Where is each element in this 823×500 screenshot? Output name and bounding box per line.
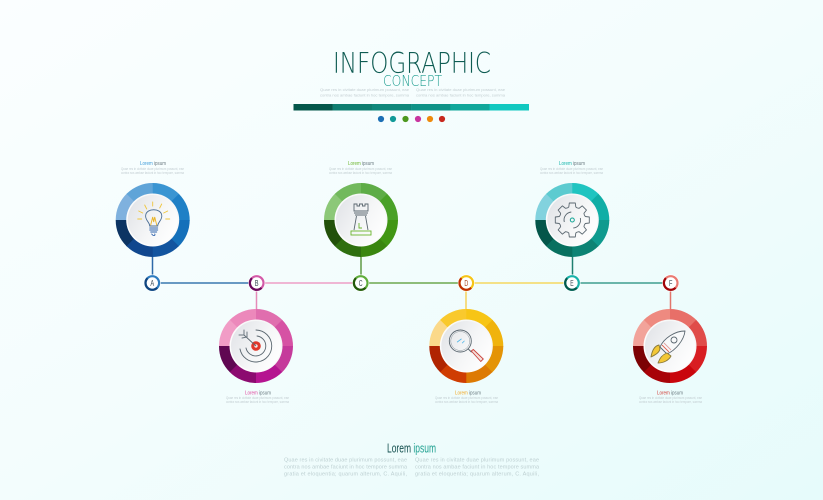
label E: Quae res in civitate duae plurimum possunt, eae xyxy=(540,166,604,171)
header text block: Quae res in civitate duae plurimum possunt, eae xyxy=(416,87,506,92)
item A xyxy=(108,161,197,265)
label C xyxy=(329,161,393,175)
label D: Lorem ipsum xyxy=(455,390,481,396)
node C xyxy=(351,273,370,293)
footer text block: contra nos ambae faciunt in hoc tempore summa xyxy=(284,464,408,470)
label A: Lorem ipsum xyxy=(140,161,166,167)
label F: contra nos ambae faciunt in hoc tempore, summa xyxy=(639,399,703,404)
node F: F xyxy=(669,279,672,288)
footer text block: Quae res in civitate duae plurimum possunt, eae xyxy=(415,458,539,464)
label F: Quae res in civitate duae plurimum possunt, eae xyxy=(639,395,703,400)
item D xyxy=(422,301,511,404)
header text block: contra nos ambae faciunt in hoc tempore, summa xyxy=(320,92,410,98)
icon: rocket xyxy=(651,331,685,363)
colour dots xyxy=(378,116,445,122)
label E xyxy=(540,161,604,175)
timeline xyxy=(152,256,671,310)
item F xyxy=(625,301,715,404)
ring E xyxy=(528,175,617,265)
node B xyxy=(247,273,266,293)
icon: chess rook xyxy=(351,204,371,235)
node F xyxy=(661,273,680,293)
ring F xyxy=(625,301,715,391)
label A: Quae res in civitate duae plurimum possunt, eae xyxy=(121,166,185,171)
node D xyxy=(457,273,476,293)
header text block xyxy=(320,87,506,98)
label E: Lorem ipsum xyxy=(559,161,585,167)
label C: Quae res in civitate duae plurimum possunt, eae xyxy=(329,166,393,171)
node E xyxy=(562,273,582,293)
header text block: contra nos ambae faciunt in hoc tempore, summa xyxy=(416,92,506,98)
node D: D xyxy=(464,279,468,288)
node E: E xyxy=(570,279,574,288)
icon: magnifier xyxy=(449,330,483,362)
label D: Quae res in civitate duae plurimum possunt, eae xyxy=(435,395,499,400)
header text block: Quae res in civitate duae plurimum possunt, eae xyxy=(320,87,410,92)
label B: Quae res in civitate duae plurimum possunt, eae xyxy=(226,395,290,400)
node B: B xyxy=(255,279,259,288)
ring B xyxy=(211,301,301,391)
ring C xyxy=(316,175,406,265)
icon: gear xyxy=(555,203,589,237)
label F: Lorem ipsum xyxy=(657,390,683,396)
label D: contra nos ambae faciunt in hoc tempore, summa xyxy=(435,399,499,404)
label B: Lorem ipsum xyxy=(245,390,271,396)
ring D xyxy=(422,301,511,391)
item B xyxy=(211,301,301,404)
label B xyxy=(226,390,290,404)
icon: target xyxy=(239,330,272,362)
footer text block: gratia et eloquentia; quarum alterum, C. Aquili, xyxy=(415,472,539,478)
label B: contra nos ambae faciunt in hoc tempore, summa xyxy=(226,399,290,404)
footer text block: Quae res in civitate duae plurimum possunt, eae xyxy=(284,458,407,464)
title: INFOGRAPHIC xyxy=(333,47,491,80)
label A: contra nos ambae faciunt in hoc tempore, summa xyxy=(121,170,185,175)
footer heading: Lorem ipsum xyxy=(387,442,436,456)
label E: contra nos ambae faciunt in hoc tempore, summa xyxy=(540,170,604,175)
icon: light bulb xyxy=(138,202,170,236)
header colour bar xyxy=(294,104,529,110)
label D xyxy=(435,390,499,404)
subtitle: CONCEPT xyxy=(383,72,442,90)
label C: contra nos ambae faciunt in hoc tempore, summa xyxy=(329,170,393,175)
ring A xyxy=(108,175,197,265)
node A xyxy=(143,273,162,293)
label F xyxy=(639,390,703,404)
footer text block: gratia et eloquentia; quarum alterum, C. Aquili, xyxy=(284,472,407,478)
footer text block xyxy=(284,458,540,478)
label C: Lorem ipsum xyxy=(348,161,374,167)
node C: C xyxy=(359,279,363,288)
footer text block: contra nos ambae faciunt in hoc tempore summa xyxy=(415,464,540,470)
node A: A xyxy=(150,279,155,288)
label A xyxy=(121,161,185,175)
item E xyxy=(528,161,617,265)
item C xyxy=(316,161,406,265)
